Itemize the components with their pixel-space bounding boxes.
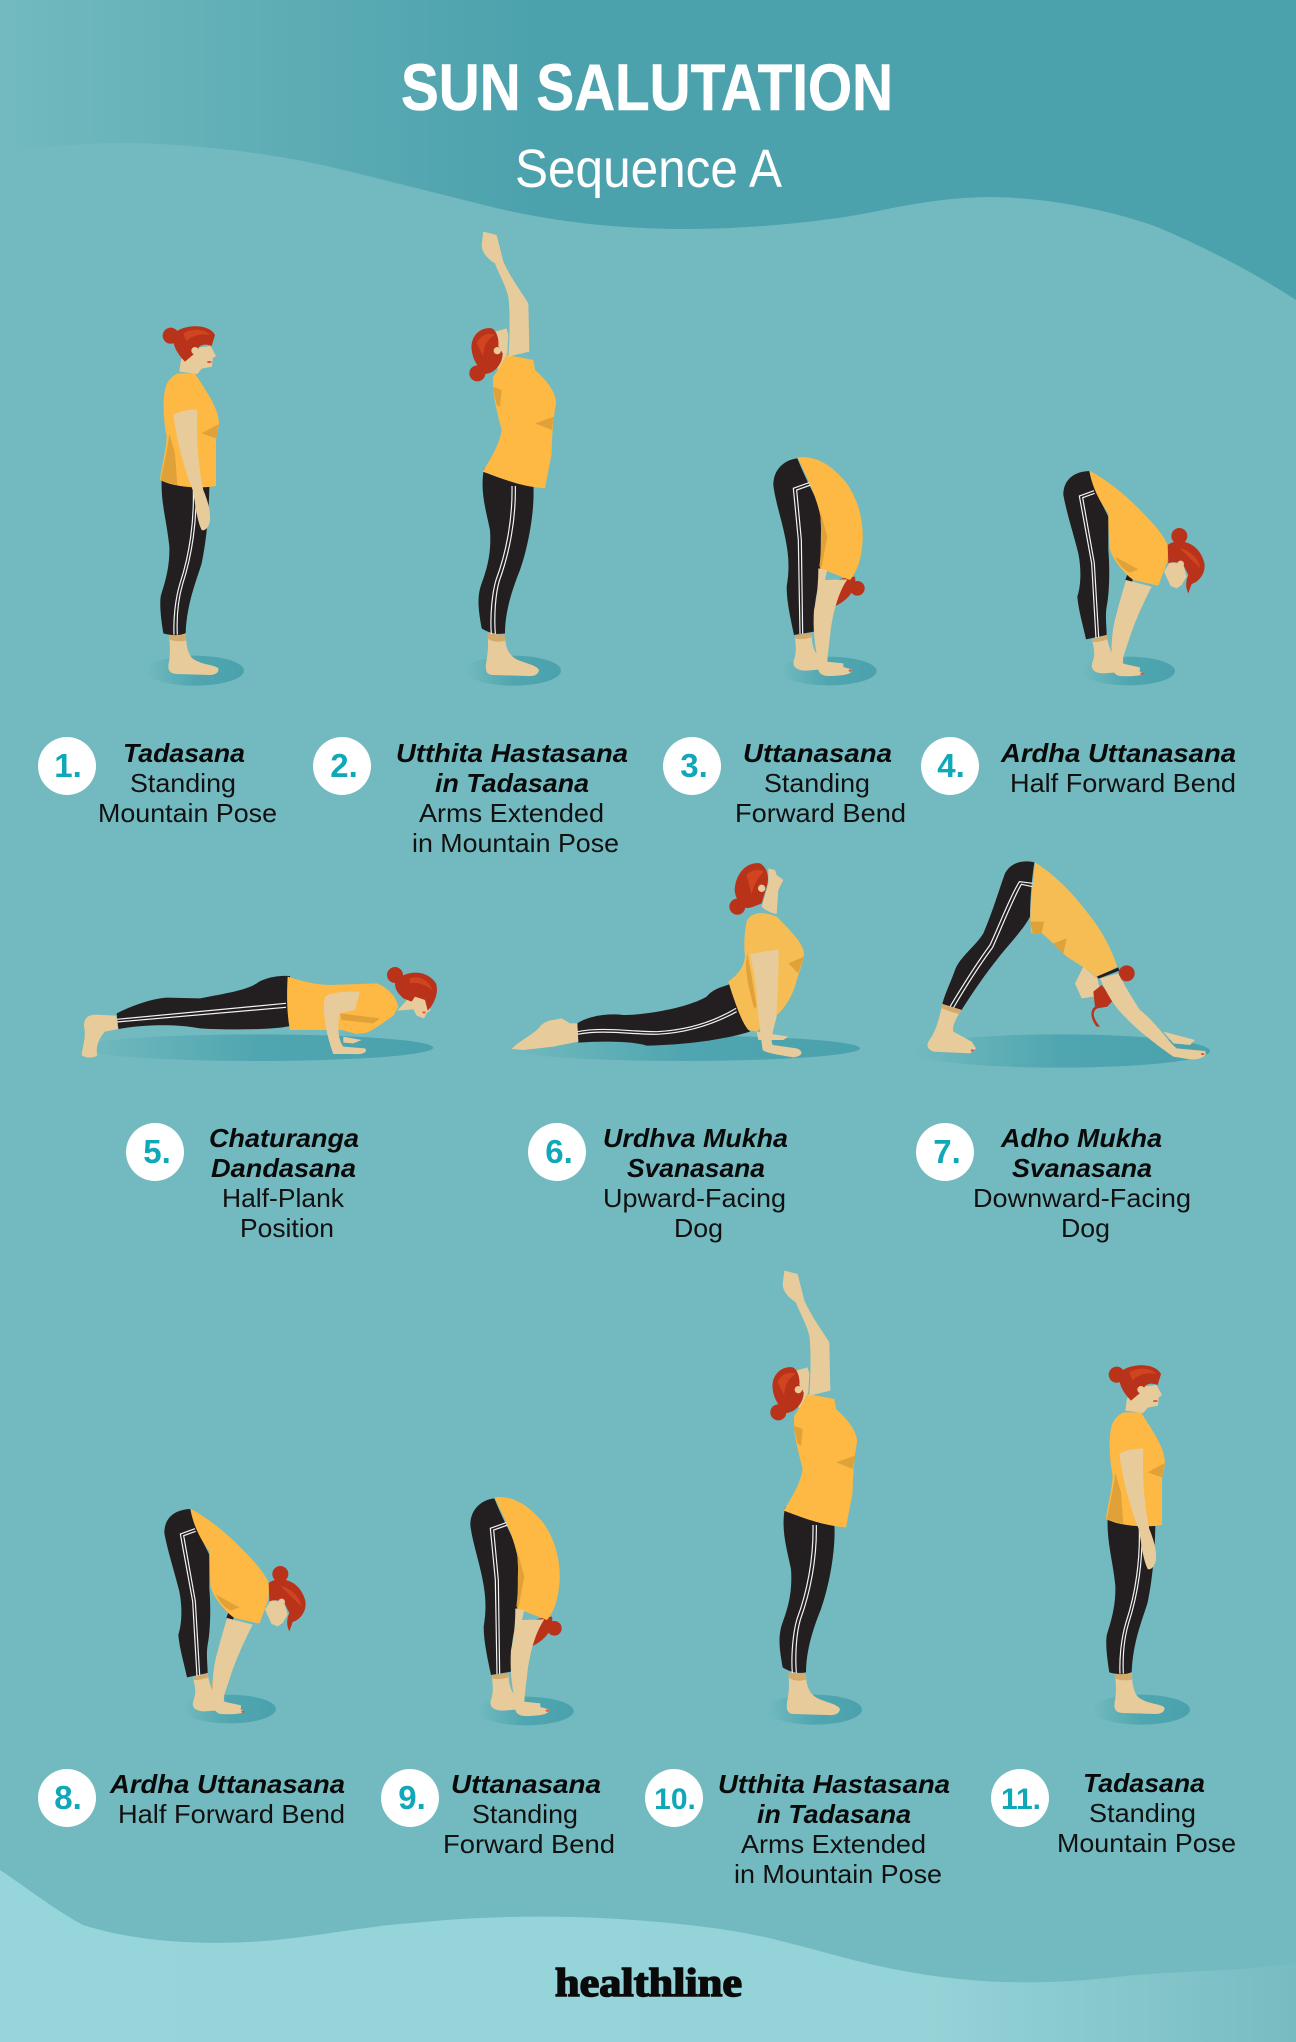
header wave	[0, 0, 1296, 300]
figure: pose 9 standing forward bend	[470, 1497, 574, 1725]
caption 9: Uttanasana	[451, 1769, 601, 1799]
caption 7: Svanasana	[1012, 1153, 1152, 1183]
caption 11	[991, 1768, 1236, 1858]
caption 4	[921, 737, 1236, 798]
caption 7: Downward-Facing	[973, 1183, 1191, 1213]
caption 4: Ardha Uttanasana	[1000, 738, 1236, 768]
caption 2: in Tadasana	[435, 768, 589, 798]
caption 1: 1.	[54, 747, 82, 784]
caption 10: 10.	[654, 1783, 696, 1816]
caption 10: in Mountain Pose	[734, 1859, 942, 1889]
caption 10: Arms Extended	[741, 1829, 926, 1859]
caption 1: Tadasana	[123, 738, 245, 768]
footer wave	[0, 1870, 1296, 2042]
figure: pose 4 half forward bend	[1063, 471, 1205, 685]
figure: pose 10 arms extended	[767, 1271, 862, 1725]
caption 8: 8.	[54, 1779, 82, 1816]
caption 2: Arms Extended	[419, 798, 604, 828]
figure: pose 8 half forward bend	[164, 1509, 306, 1723]
caption 6: Urdhva Mukha	[603, 1123, 788, 1153]
title: SUN SALUTATION	[401, 50, 893, 124]
caption 5	[126, 1123, 359, 1243]
caption 3: Forward Bend	[735, 798, 906, 828]
caption 9: 9.	[398, 1779, 426, 1816]
caption 7: Adho Mukha	[1000, 1123, 1162, 1153]
subtitle: Sequence A	[515, 139, 782, 199]
figure: pose 3 standing forward bend	[773, 457, 877, 685]
caption 2: in Mountain Pose	[412, 828, 619, 858]
caption 9	[381, 1769, 615, 1859]
caption 7: 7.	[933, 1133, 961, 1170]
caption 6: Svanasana	[627, 1153, 765, 1183]
caption 6: Dog	[674, 1213, 723, 1243]
caption 1: Standing	[130, 768, 236, 798]
caption 4: Half Forward Bend	[1010, 768, 1236, 798]
caption 6	[528, 1123, 788, 1243]
caption 11: 11.	[1001, 1783, 1041, 1816]
caption 3: Uttanasana	[743, 738, 892, 768]
caption 10: Utthita Hastasana	[718, 1769, 950, 1799]
figure: pose 1 mountain pose	[146, 326, 244, 686]
caption 7	[916, 1123, 1191, 1243]
caption 3	[663, 737, 906, 828]
caption 2: 2.	[330, 747, 358, 784]
caption 3: Standing	[764, 768, 870, 798]
caption 3: 3.	[680, 747, 708, 784]
caption 10	[645, 1769, 950, 1889]
caption 9: Forward Bend	[443, 1829, 615, 1859]
figure: pose 2 arms extended	[466, 232, 561, 686]
caption 7: Dog	[1061, 1213, 1110, 1243]
caption 11: Tadasana	[1083, 1768, 1205, 1798]
caption 11: Mountain Pose	[1057, 1828, 1236, 1858]
caption 5: Dandasana	[211, 1153, 356, 1183]
caption 1	[38, 737, 277, 828]
caption 1: Mountain Pose	[98, 798, 277, 828]
figure: pose 7 downward-facing dog	[910, 861, 1210, 1068]
logo: healthline: healthline	[555, 1960, 742, 2005]
figure: pose 11 mountain pose	[1092, 1365, 1190, 1725]
caption 5: Position	[240, 1213, 334, 1243]
caption 5: 5.	[143, 1133, 171, 1170]
caption 2: Utthita Hastasana	[396, 738, 628, 768]
caption 10: in Tadasana	[757, 1799, 911, 1829]
figure: pose 5 half plank	[80, 967, 437, 1061]
figure: pose 6 upward-facing dog	[507, 863, 860, 1061]
caption 8	[38, 1769, 345, 1829]
caption 4: 4.	[937, 747, 965, 784]
caption 5: Half-Plank	[222, 1183, 345, 1213]
caption 8: Half Forward Bend	[118, 1799, 345, 1829]
caption 9: Standing	[472, 1799, 578, 1829]
caption 2	[313, 737, 628, 858]
caption 6: 6.	[545, 1133, 573, 1170]
caption 6: Upward-Facing	[603, 1183, 786, 1213]
caption 8: Ardha Uttanasana	[109, 1769, 345, 1799]
caption 11: Standing	[1089, 1798, 1196, 1828]
caption 5: Chaturanga	[209, 1123, 359, 1153]
